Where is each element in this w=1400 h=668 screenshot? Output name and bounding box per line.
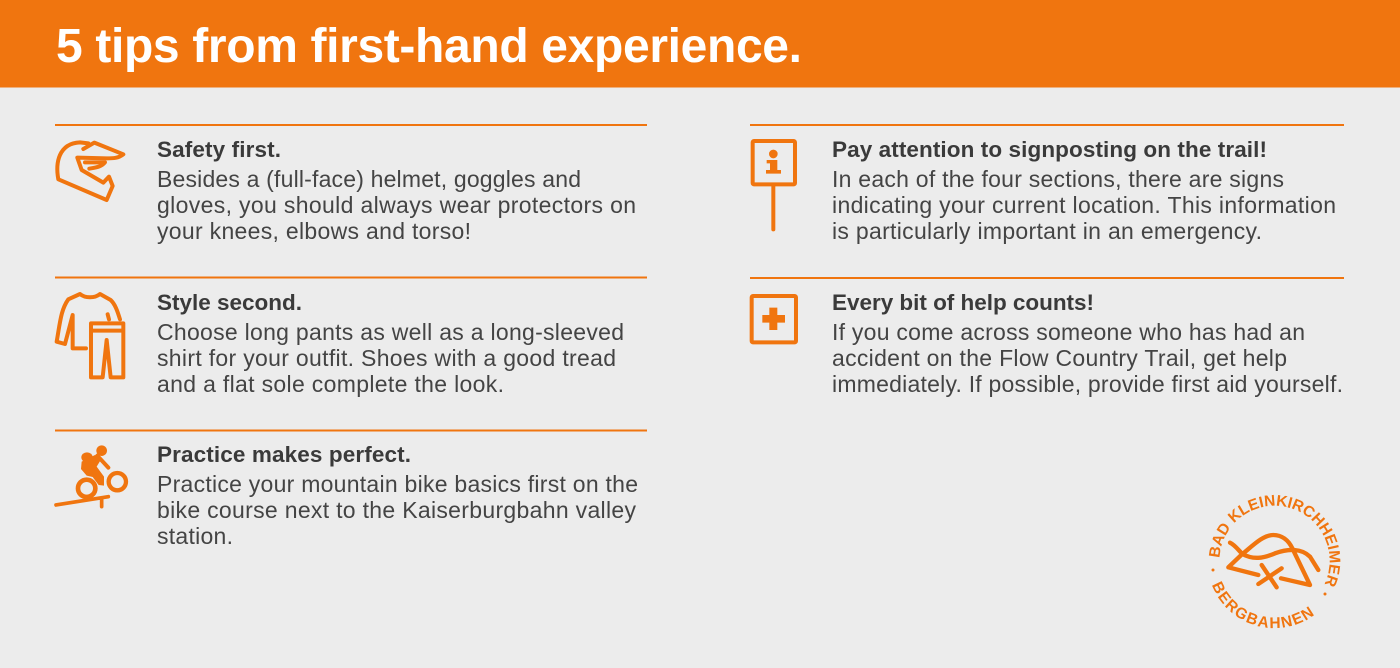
icon: helmet <box>57 142 123 200</box>
title: 5 tips from first-hand experience. <box>56 20 802 73</box>
panel: style second <box>55 278 647 397</box>
logo: Bad Kleinkirchheimer Bergbahnen: BAD KLEINKIRCHHEIMER <box>1208 494 1340 586</box>
text block: Practice your mountain bike basics first on the <box>157 471 638 497</box>
heading: Pay attention to signposting on the trail! <box>832 137 1267 162</box>
text block: indicating your current location. This information <box>832 192 1336 218</box>
heading: Every bit of help counts! <box>832 290 1094 315</box>
text block: gloves, you should always wear protectors on <box>157 192 636 218</box>
text block: is particularly important in an emergency. <box>832 218 1262 244</box>
text block: In each of the four sections, there are signs <box>832 166 1284 192</box>
panel: practice makes perfect <box>55 430 647 549</box>
heading: Style second. <box>157 290 302 315</box>
text block: your knees, elbows and torso! <box>157 218 471 244</box>
text block: immediately. If possible, provide first aid yourself. <box>832 371 1343 397</box>
heading: Safety first. <box>157 137 281 162</box>
panel: help counts <box>750 278 1344 397</box>
text block: bike course next to the Kaiserburgbahn valley <box>157 497 636 523</box>
icon: mountain biker <box>56 445 126 507</box>
logo: Bad Kleinkirchheimer Bergbahnen: BERGBAHNEN <box>1212 581 1314 628</box>
panel: signposting <box>750 125 1344 244</box>
text block: Besides a (full-face) helmet, goggles and <box>157 166 581 192</box>
text block: shirt for your outfit. Shoes with a good tread <box>157 345 616 371</box>
text block <box>157 471 638 549</box>
text block <box>832 166 1336 244</box>
header band <box>0 0 1400 88</box>
panel: safety first <box>55 125 647 244</box>
text block: If you come across someone who has had an <box>832 319 1305 345</box>
text block <box>157 166 636 244</box>
heading: Practice makes perfect. <box>157 442 411 467</box>
text block: and a flat sole complete the look. <box>157 371 504 397</box>
text block <box>157 319 624 397</box>
logo: Bad Kleinkirchheimer Bergbahnen <box>1208 494 1340 628</box>
icon: information sign <box>753 141 795 229</box>
text block: station. <box>157 523 233 549</box>
icon: shirt and pants <box>57 294 123 377</box>
text block: Choose long pants as well as a long-sleeved <box>157 319 624 345</box>
text block <box>832 319 1343 397</box>
text block: accident on the Flow Country Trail, get help <box>832 345 1287 371</box>
icon: first aid <box>752 296 796 342</box>
